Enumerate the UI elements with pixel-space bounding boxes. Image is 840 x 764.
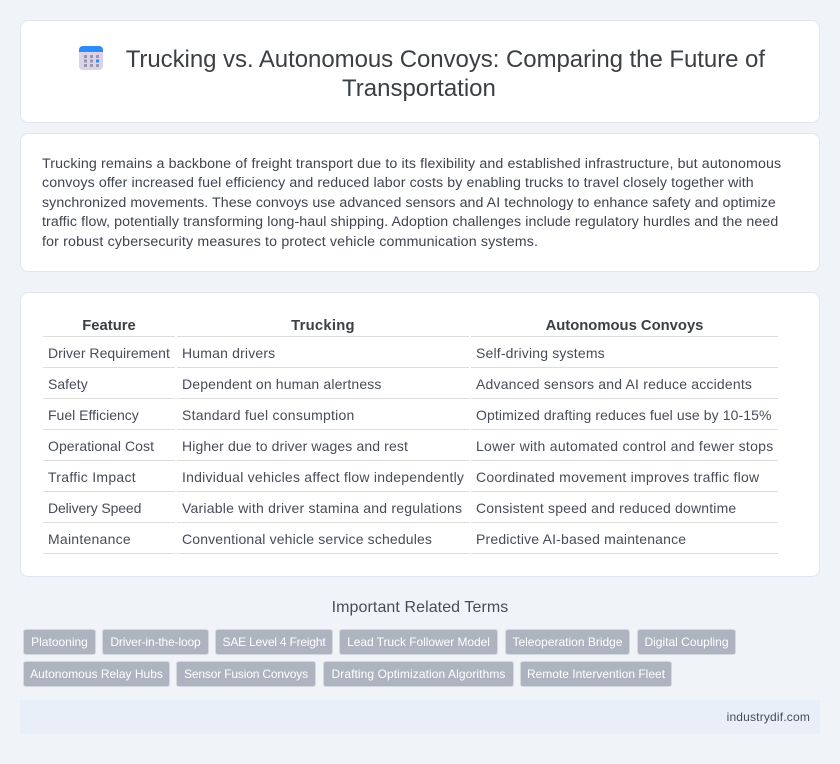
comparison table: Dependent on human alertness [182, 376, 382, 392]
title: Transportation [342, 74, 496, 102]
intro paragraph: Trucking remains a backbone of freight transport due to its flexibility and established infrastructure, but autonomous [42, 156, 781, 172]
comparison table: Conventional vehicle service schedules [182, 531, 432, 547]
tag: Teleoperation Bridge [512, 635, 623, 649]
tag [637, 629, 736, 655]
intro paragraph: for robust cybersecurity measures to protect vehicle communication systems. [42, 234, 538, 250]
tag: Remote Intervention Fleet [527, 667, 665, 681]
tag [339, 629, 498, 655]
comparison table [43, 318, 778, 554]
table headers: Feature [82, 318, 136, 334]
table cells: Driver Requirement [48, 345, 170, 361]
comparison table: Consistent speed and reduced downtime [476, 500, 736, 516]
related terms heading: Important Related Terms [332, 598, 508, 616]
tag: Autonomous Relay Hubs [30, 667, 163, 681]
tag [520, 661, 672, 687]
tag: Digital Coupling [644, 635, 729, 649]
icon: calendar [79, 46, 103, 70]
intro card [20, 133, 820, 272]
comparison table: Optimized drafting reduces fuel use by 10-15% [476, 407, 772, 423]
comparison table: Fuel Efficiency [48, 407, 139, 423]
comparison table: Self-driving systems [476, 345, 605, 361]
table card [20, 292, 820, 577]
title: Trucking vs. Autonomous Convoys: Comparing the Future of [126, 46, 765, 72]
comparison table: Lower with automated control and fewer stops [476, 438, 773, 454]
related terms tags [23, 629, 736, 687]
footer [20, 700, 820, 734]
comparison table: Advanced sensors and AI reduce accidents [476, 376, 752, 392]
title card [20, 20, 820, 123]
comparison table: Predictive AI-based maintenance [476, 531, 686, 547]
comparison table: Operational Cost [48, 438, 154, 454]
tag [23, 629, 96, 655]
comparison table: Traffic Impact [48, 469, 136, 485]
comparison table: Standard fuel consumption [182, 407, 355, 423]
comparison table: Higher due to driver wages and rest [182, 438, 408, 454]
comparison table: Variable with driver stamina and regulations [182, 500, 462, 516]
intro paragraph [42, 156, 781, 250]
intro paragraph: synchronized movements. These convoys use advanced sensors and AI technology to enhance safety and optimize [42, 195, 776, 211]
tag: Drafting Optimization Algorithms [332, 667, 505, 681]
tag [102, 629, 209, 655]
tag [215, 629, 333, 655]
source label: industrydif.com [727, 710, 810, 724]
intro paragraph: convoys offer increased fuel efficiency and reduced labor costs by enabling trucks to travel closely together with [42, 175, 754, 191]
table headers [82, 318, 703, 334]
comparison table: Individual vehicles affect flow independently [182, 469, 464, 485]
comparison table: Human drivers [182, 345, 275, 361]
tag: Lead Truck Follower Model [347, 635, 490, 649]
tag: Sensor Fusion Convoys [184, 667, 308, 681]
title [126, 46, 766, 102]
tag: SAE Level 4 Freight [223, 635, 325, 649]
tag [23, 661, 170, 687]
comparison table: Safety [48, 376, 88, 392]
tag [176, 661, 316, 687]
comparison table: Delivery Speed [48, 500, 141, 516]
tag [323, 661, 514, 687]
tag: Platooning [31, 635, 88, 649]
comparison table: Coordinated movement improves traffic flow [476, 469, 759, 485]
intro paragraph: traffic flow, potentially transforming long-haul shipping. Adoption challenges include regulatory hurdles and the need [42, 214, 778, 230]
tag [505, 629, 630, 655]
comparison table: Maintenance [48, 531, 131, 547]
table headers: Autonomous Convoys [546, 318, 703, 334]
tag: Driver-in-the-loop [110, 635, 201, 649]
table headers: Trucking [291, 318, 355, 334]
